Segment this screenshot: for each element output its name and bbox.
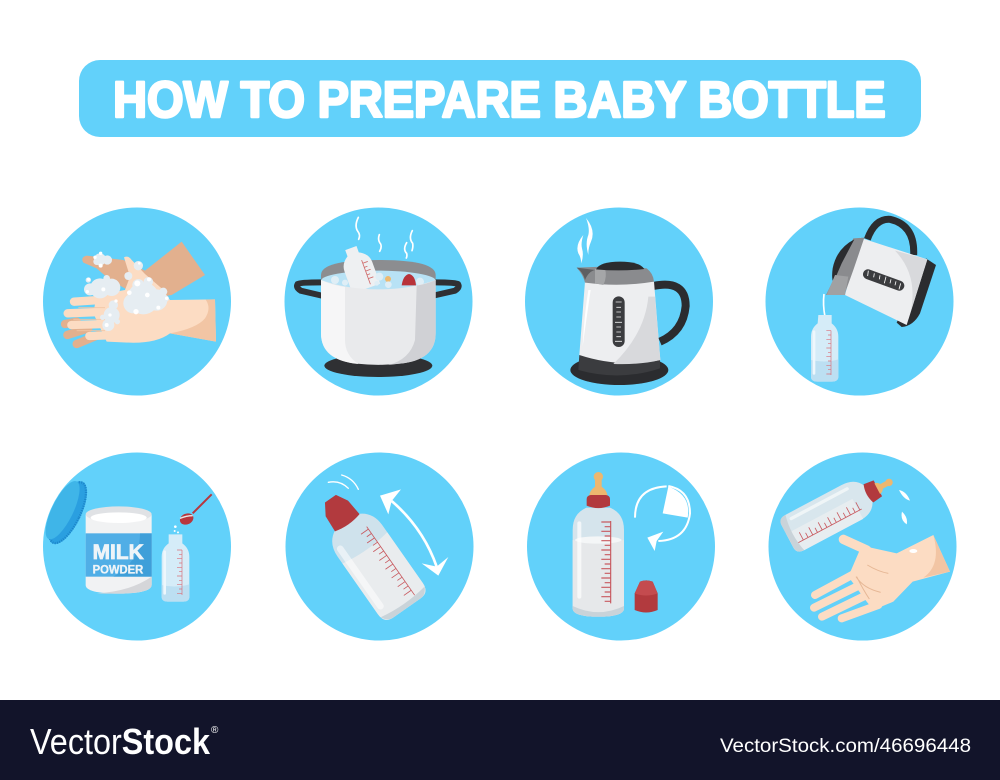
small bottle — [811, 315, 838, 382]
icon: can lid — [38, 475, 95, 549]
watermark url: VectorStock.com/46696448 — [720, 736, 971, 757]
title banner — [79, 60, 921, 137]
icon: bottle — [778, 463, 902, 554]
icon: can — [86, 515, 152, 594]
step 4: pouring water into bottle — [766, 208, 954, 396]
icon: cap — [635, 580, 658, 612]
title banner: HOW TO PREPARE BABY BOTTLE — [113, 72, 886, 128]
footer bar — [0, 700, 1000, 780]
step 6: shaking the bottle — [286, 452, 474, 640]
step 8: test temperature on wrist — [768, 452, 956, 640]
motion marks — [328, 475, 358, 489]
icon: double arrow — [380, 489, 448, 576]
step 5: milk powder can, lid and spoon — [38, 452, 231, 640]
step 1: washing hands — [43, 208, 231, 396]
steam — [577, 218, 593, 263]
step 5: milk powder can, lid and spoon: POWDER — [93, 563, 144, 577]
steam — [356, 217, 413, 258]
icon: clock arrow — [635, 486, 690, 551]
icon: bottle — [573, 508, 624, 617]
watermark logo: VectorStock — [30, 721, 211, 762]
step 7: waiting with clock and bottle — [527, 452, 715, 640]
icon: spoon — [193, 494, 212, 513]
icon: nipple — [589, 472, 607, 496]
icon: hand — [814, 535, 950, 618]
icon: milk drops — [899, 490, 910, 524]
step 2: boiling bottle in pot — [284, 208, 472, 396]
step 3: kettle boiling — [525, 208, 713, 396]
step 5: milk powder can, lid and spoon: MILK — [93, 539, 144, 564]
footer bar: ® — [211, 725, 219, 736]
icon: small bottle — [162, 534, 189, 602]
